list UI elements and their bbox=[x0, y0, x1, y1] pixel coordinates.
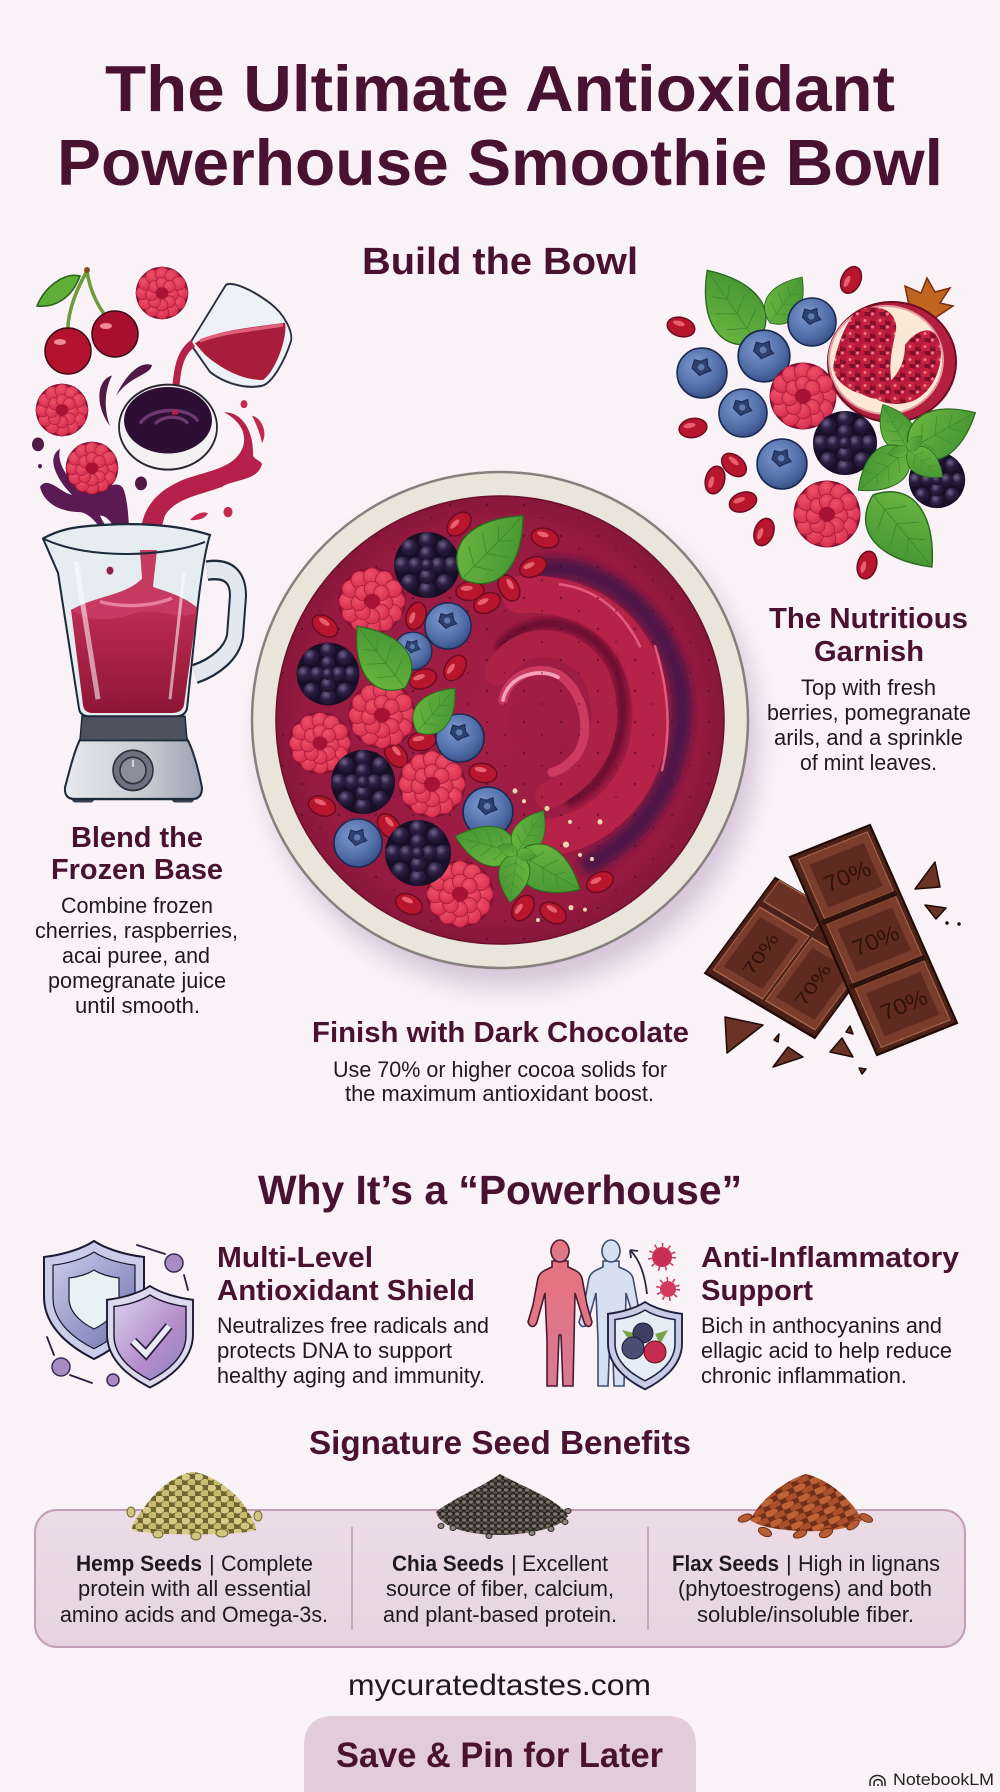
mint cluster bbox=[846, 392, 987, 585]
text block: the nutritious garnish: berries, pomegranate bbox=[767, 700, 971, 725]
blue body bbox=[579, 1240, 643, 1386]
smoothie surface with swirl bbox=[276, 496, 724, 944]
icon: flax seed pile bbox=[737, 1474, 874, 1540]
illustration: finished smoothie bowl bbox=[252, 472, 758, 988]
text block: anti-inflammatory support: Support bbox=[701, 1275, 813, 1307]
icon: hemp seed pile bbox=[127, 1472, 262, 1540]
text block: the nutritious garnish: arils, and a sprinkle bbox=[774, 725, 963, 750]
chocolate bar: front: 70% bbox=[820, 856, 875, 897]
icon: acai drops bbox=[99, 364, 152, 426]
text block: blend the frozen base: until smooth. bbox=[75, 993, 200, 1018]
mint leaves behind bbox=[685, 255, 816, 358]
hemp sprinkle bbox=[512, 788, 602, 922]
raspberries bbox=[770, 363, 860, 547]
text block: anti-inflammatory support: ellagic acid to help reduce bbox=[701, 1338, 952, 1363]
text: hemp seeds: amino acids and Omega-3s. bbox=[60, 1602, 328, 1627]
text block: the nutritious garnish: Garnish bbox=[814, 636, 924, 668]
shield with berries bbox=[608, 1302, 682, 1389]
mint leaves in bowl bbox=[338, 497, 591, 909]
heading: signature seed benefits: Signature Seed Benefits bbox=[309, 1424, 691, 1461]
chocolate bar: front: 70% bbox=[876, 984, 931, 1026]
text: chia seeds: | bbox=[511, 1551, 517, 1576]
text: flax seeds: Flax Seeds bbox=[672, 1551, 779, 1576]
viruses bbox=[650, 1245, 678, 1299]
text block: multi-level antioxidant shield: Multi-Level bbox=[217, 1242, 373, 1274]
text block: blend the frozen base: Combine frozen bbox=[61, 893, 213, 918]
text block: finish with dark chocolate: the maximum antioxidant boost. bbox=[345, 1081, 654, 1106]
icon: red splash bbox=[140, 412, 262, 550]
website url: mycuratedtastes.com bbox=[348, 1669, 651, 1702]
blackberries in bowl bbox=[297, 532, 460, 886]
pomegranate half bbox=[828, 278, 956, 422]
chocolate bar: front bbox=[790, 825, 957, 1055]
chocolate bar: rear bbox=[705, 878, 885, 1038]
button: save and pin bbox=[304, 1716, 696, 1792]
text: hemp seeds: Hemp Seeds bbox=[76, 1551, 202, 1576]
text block: anti-inflammatory support: Bich in anthocyanins and bbox=[701, 1313, 942, 1338]
text block: multi-level antioxidant shield: Antioxidant Shield bbox=[217, 1275, 475, 1307]
icon: chia seed pile bbox=[436, 1474, 571, 1538]
text block: anti-inflammatory support bbox=[701, 1242, 959, 1388]
text: hemp seeds: Complete bbox=[221, 1551, 313, 1576]
title bbox=[57, 52, 943, 199]
text block: multi-level antioxidant shield: protects DNA to support bbox=[217, 1338, 452, 1363]
text block: the nutritious garnish: The Nutritious bbox=[769, 603, 968, 635]
icon: cherries bbox=[37, 267, 138, 374]
title: Powerhouse Smoothie Bowl bbox=[57, 126, 943, 199]
text block: blend the frozen base: pomegranate juice bbox=[48, 968, 226, 993]
text block: blend the frozen base: Blend the bbox=[71, 822, 203, 854]
text block: finish with dark chocolate bbox=[312, 1017, 689, 1106]
title: The Ultimate Antioxidant bbox=[105, 52, 895, 125]
icon: bodies with protective shield bbox=[528, 1240, 682, 1389]
text block: blend the frozen base bbox=[35, 822, 238, 1018]
raspberries in bowl bbox=[289, 568, 493, 927]
text: flax seeds bbox=[672, 1551, 940, 1627]
text block: blend the frozen base: acai puree, and bbox=[62, 943, 210, 968]
text block: the nutritious garnish: Top with fresh bbox=[801, 675, 936, 700]
text block: anti-inflammatory support: chronic inflammation. bbox=[701, 1363, 907, 1388]
arrow bbox=[630, 1250, 647, 1294]
icon: blender jar with handle bbox=[43, 524, 238, 716]
chocolate bar: rear: 70% bbox=[738, 930, 783, 978]
icon: blender base with dial bbox=[65, 716, 202, 803]
illustration: fresh berries garnish bbox=[665, 255, 987, 585]
text: flax seeds: | bbox=[786, 1551, 792, 1576]
blueberries bbox=[677, 298, 836, 489]
watermark: notebooklm: NotebookLM bbox=[893, 1770, 994, 1789]
icon: raspberries bbox=[36, 267, 188, 436]
icon: antioxidant shields bbox=[44, 1241, 193, 1387]
text: flax seeds: High in lignans bbox=[798, 1551, 940, 1576]
blackberries bbox=[813, 411, 965, 508]
chocolate bar: front: 70% bbox=[848, 920, 903, 961]
bowl rim bbox=[252, 472, 748, 968]
text: hemp seeds: | bbox=[209, 1551, 215, 1576]
text block: the nutritious garnish bbox=[767, 603, 971, 775]
text block: anti-inflammatory support: Anti-Inflammatory bbox=[701, 1242, 959, 1274]
chocolate fragments bbox=[725, 862, 960, 1074]
icon: pitcher pouring juice bbox=[175, 284, 291, 414]
text block: blend the frozen base: cherries, raspberries, bbox=[35, 918, 238, 943]
illustration: dark chocolate bars bbox=[705, 825, 960, 1074]
panel: seed benefits bbox=[35, 1472, 965, 1647]
text block: multi-level antioxidant shield: healthy aging and immunity. bbox=[217, 1363, 485, 1388]
text block: the nutritious garnish: of mint leaves. bbox=[800, 750, 937, 775]
text block: multi-level antioxidant shield: Neutralizes free radicals and bbox=[217, 1313, 489, 1338]
text: flax seeds: soluble/insoluble fiber. bbox=[697, 1602, 914, 1627]
button: save and pin: Save & Pin for Later bbox=[336, 1736, 663, 1775]
illustration: blender and pouring ingredients bbox=[32, 267, 291, 803]
text: chia seeds: Excellent bbox=[522, 1551, 608, 1576]
text: chia seeds: Chia Seeds bbox=[392, 1551, 504, 1576]
icon: purple splash bbox=[40, 449, 131, 547]
heading: build the bowl: Build the Bowl bbox=[362, 241, 638, 283]
chocolate bar: rear: 70% bbox=[791, 961, 836, 1009]
text: chia seeds bbox=[383, 1551, 617, 1627]
text block: blend the frozen base: Frozen Base bbox=[51, 854, 223, 886]
blueberries in bowl bbox=[334, 603, 513, 867]
text block: finish with dark chocolate: Use 70% or higher cocoa solids for bbox=[333, 1057, 667, 1082]
text: chia seeds: and plant-based protein. bbox=[383, 1602, 617, 1627]
text: chia seeds: source of fiber, calcium, bbox=[386, 1576, 614, 1601]
pomegranate arils bbox=[306, 507, 617, 928]
loose pomegranate arils bbox=[665, 263, 880, 581]
text block: finish with dark chocolate: Finish with Dark Chocolate bbox=[312, 1017, 689, 1049]
text block: multi-level antioxidant shield bbox=[217, 1242, 489, 1388]
text: hemp seeds bbox=[60, 1551, 328, 1627]
text: hemp seeds: protein with all essential bbox=[78, 1576, 311, 1601]
red body bbox=[528, 1240, 592, 1386]
icon: raspberry in splash bbox=[66, 442, 118, 494]
heading: why it's a powerhouse: Why It’s a “Powerhouse” bbox=[258, 1167, 742, 1213]
icon: acai puree bowl bbox=[119, 385, 217, 470]
bowl shadow bbox=[262, 492, 758, 988]
text: flax seeds: (phytoestrogens) and both bbox=[678, 1576, 932, 1601]
splash droplets bbox=[32, 400, 264, 520]
